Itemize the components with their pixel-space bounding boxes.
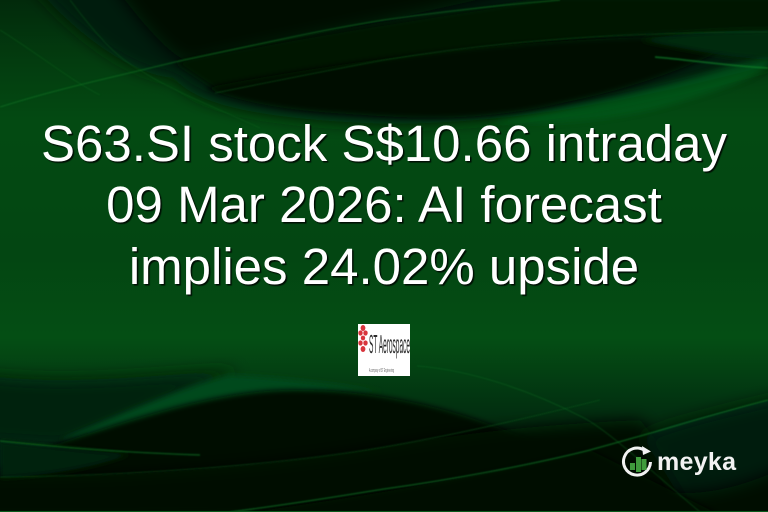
logo: meyka: meyka [657,448,737,476]
top dark corner [110,0,560,62]
icon: ring with bars [624,446,651,475]
bottom left dim [0,370,240,445]
logo: ST Aerospace [358,324,410,376]
bright band beneath top blob [490,58,768,124]
bottom blob [0,390,640,512]
title: S63.SI stock S$10.66 intraday [41,115,727,172]
title [41,115,728,296]
title: implies 24.02% upside [129,238,639,295]
logo: meyka [622,446,737,477]
bottom green band [60,375,384,440]
top dark blob [205,37,740,118]
streaks [0,0,560,107]
top: dim zone under streak [30,0,768,124]
title: 09 Mar 2026: AI forecast [106,176,662,233]
